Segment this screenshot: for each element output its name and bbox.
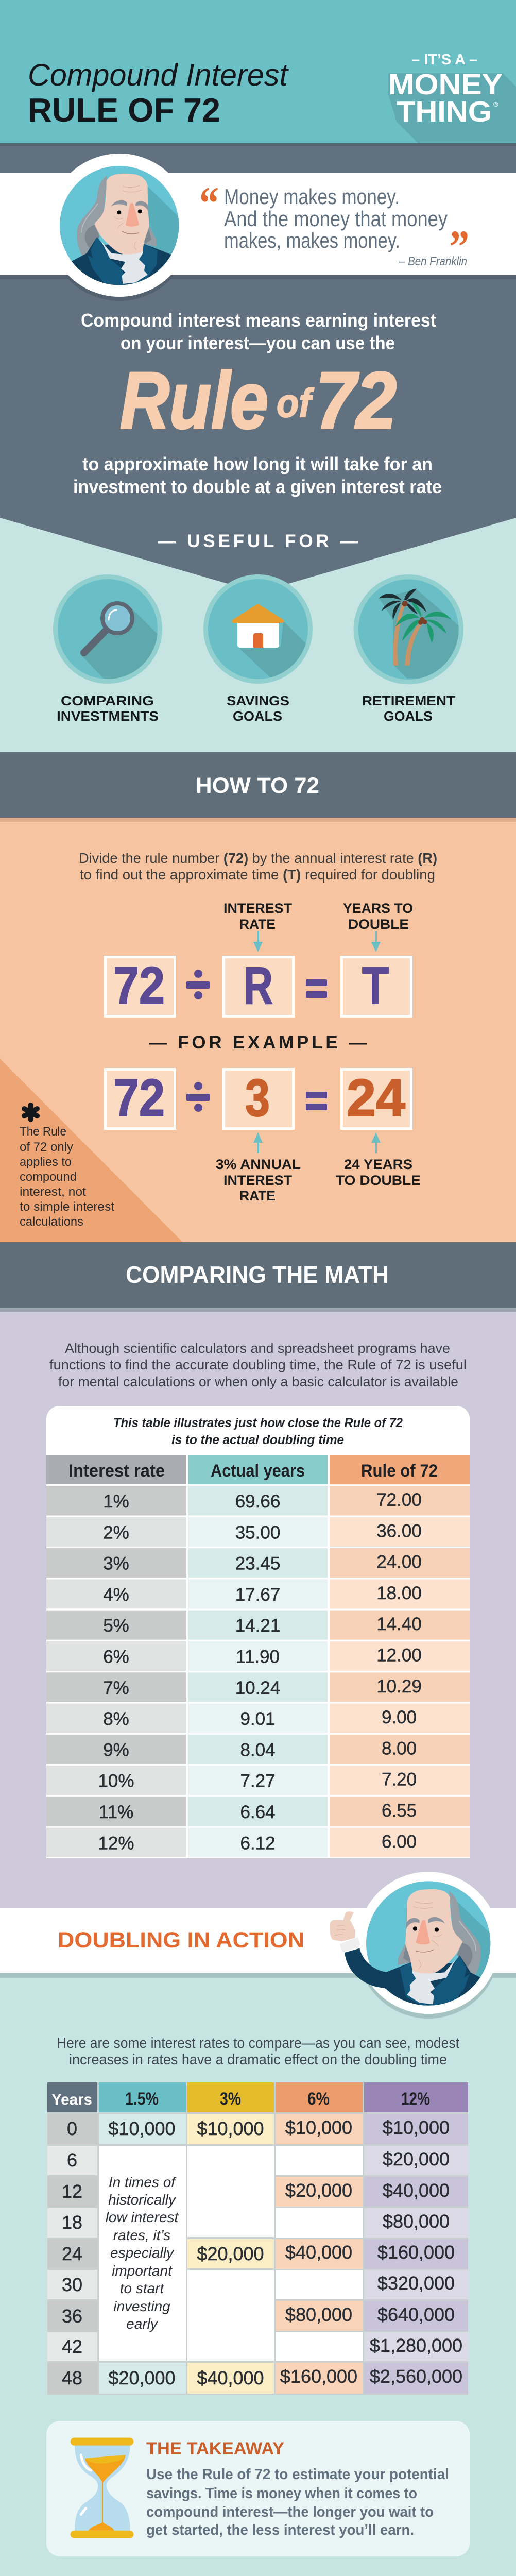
column: 12 percent: $20,000 <box>383 2148 450 2170</box>
column: 1.5 percent: $10,000 <box>108 2118 176 2139</box>
label: years to double <box>343 901 413 932</box>
table values: 35.00 <box>235 1522 280 1543</box>
panel: the takeaway <box>46 2421 470 2556</box>
table values: 12% <box>98 1833 134 1853</box>
quote text: ” <box>450 222 469 273</box>
column: years: 12 <box>62 2181 82 2202</box>
panel: how to 72 <box>0 850 437 1242</box>
table values: 9.01 <box>240 1709 276 1729</box>
table cell fills <box>47 2114 468 2394</box>
note: compound only: calculations <box>20 1215 83 1229</box>
intro text continued <box>73 453 442 497</box>
note: low interest rates: important <box>112 2263 173 2279</box>
label: 3% annual interest rate: 3% ANNUAL <box>216 1157 301 1172</box>
column: years: 24 <box>62 2243 82 2264</box>
table values: 7.27 <box>240 1771 276 1791</box>
title <box>28 58 289 129</box>
logo: it's a money thing: MONEY <box>388 68 503 101</box>
heading: doubling in action: DOUBLING IN ACTION <box>58 1928 304 1953</box>
column: 12 percent: $40,000 <box>383 2180 450 2201</box>
table header: 3% <box>220 2089 241 2109</box>
logo: it's a money thing: – IT’S A – <box>411 52 477 68</box>
column: 12 percent: $80,000 <box>383 2211 450 2232</box>
heading: how to 72: HOW TO 72 <box>196 773 319 798</box>
label: savings goals: GOALS <box>233 708 282 724</box>
label: years to double: YEARS TO <box>343 901 413 916</box>
table header: Rule of 72 <box>361 1461 438 1481</box>
table header: Interest rate <box>68 1461 165 1481</box>
icon: house <box>203 574 313 684</box>
column: 1.5 percent <box>108 2118 176 2388</box>
panel: doubling in action <box>47 1872 500 2395</box>
title: Compound Interest <box>28 58 289 92</box>
heading: comparing the math: COMPARING THE MATH <box>126 1261 389 1288</box>
takeaway text <box>146 2466 449 2538</box>
column: 3 percent <box>197 2118 264 2388</box>
note: low interest rates <box>106 2174 179 2332</box>
quote text: – Ben Franklin <box>399 255 467 268</box>
label: interest rate <box>223 901 293 932</box>
label: savings goals <box>227 693 289 724</box>
table: growth of 10000 by rate <box>47 2082 468 2395</box>
intro paragraph: Here are some interest rates to compare—as you can see, modest <box>57 2035 459 2052</box>
table caption <box>113 1416 403 1447</box>
portrait: ben franklin <box>60 166 179 285</box>
formula: 72 / 3 = 24: 72 <box>113 1069 165 1127</box>
table values: 7.20 <box>382 1770 417 1790</box>
icon: hourglass <box>71 2438 133 2538</box>
table caption: This table illustrates just how close the Rule of 72 <box>113 1416 403 1430</box>
quote text: makes, makes money. <box>224 228 400 252</box>
table values: 3% <box>103 1554 129 1574</box>
table values: 14.40 <box>376 1614 422 1634</box>
table header <box>46 1455 470 1484</box>
label: interest rate: RATE <box>239 917 276 932</box>
arrow: down to T <box>371 931 381 952</box>
label: comparing investments: INVESTMENTS <box>57 708 159 724</box>
formula: 72 / R = T: T <box>362 956 389 1015</box>
formula: 72 / R = T: R <box>244 956 273 1015</box>
note: compound only: applies to <box>20 1155 72 1169</box>
table header: Actual years <box>211 1461 305 1481</box>
table values: 6.00 <box>382 1832 417 1852</box>
table values: 36.00 <box>376 1521 422 1541</box>
note: compound only <box>20 1125 114 1229</box>
column: 12 percent <box>370 2117 462 2387</box>
table values: 11.90 <box>236 1647 280 1667</box>
column: 3 percent: $10,000 <box>197 2118 264 2139</box>
intro paragraph: Although scientific calculators and spreadsheet programs have <box>65 1341 450 1356</box>
note: low interest rates: rates, it’s <box>113 2227 170 2243</box>
table values: 9% <box>103 1740 129 1760</box>
heading: for example: — FOR EXAMPLE — <box>149 1032 367 1053</box>
table values: 69.66 <box>235 1492 280 1512</box>
column: 12 percent: $640,000 <box>377 2304 455 2325</box>
table values: 14.21 <box>235 1616 280 1636</box>
table values: 5% <box>103 1616 129 1636</box>
column: years: 0 <box>67 2118 77 2139</box>
heading: rule of 72: 72 <box>316 356 397 446</box>
column: 6 percent: $80,000 <box>285 2304 352 2325</box>
column: 12 percent: $2,560,000 <box>370 2366 462 2387</box>
table values: 23.45 <box>235 1554 280 1574</box>
takeaway text: savings. Time is money when it comes to <box>146 2485 417 2502</box>
logo: it's a money thing: THING <box>397 95 492 128</box>
column: 12 percent: $160,000 <box>377 2242 455 2263</box>
icon: magnifying glass <box>53 574 162 684</box>
table values: 10.24 <box>235 1678 280 1698</box>
note: low interest rates: In times of <box>109 2174 177 2190</box>
label: 3% annual interest rate: RATE <box>239 1188 276 1204</box>
panel: intro <box>73 310 442 497</box>
quote text: “ <box>199 178 219 229</box>
intro paragraph: functions to find the accurate doubling time, the Rule of 72 is useful <box>49 1357 467 1372</box>
table values: 6.55 <box>382 1801 417 1821</box>
takeaway text: Use the Rule of 72 to estimate your potential <box>146 2466 449 2483</box>
table values <box>98 1490 422 1853</box>
column: 6 percent: $40,000 <box>285 2242 352 2263</box>
table values: 9.00 <box>382 1707 417 1727</box>
icon: palm trees <box>354 574 463 684</box>
table: doubling time comparison <box>46 1406 470 1858</box>
label: years to double: DOUBLE <box>348 917 409 932</box>
column: 12 percent: $10,000 <box>383 2117 450 2138</box>
label: 3% annual interest rate <box>216 1157 301 1204</box>
note: low interest rates: historically <box>108 2192 177 2208</box>
table header: 1.5% <box>125 2089 159 2109</box>
label: 3% annual interest rate: INTEREST <box>223 1173 293 1188</box>
formula: 72 / 3 = 24: 24 <box>347 1069 405 1127</box>
table values: 17.67 <box>235 1585 280 1605</box>
intro text continued: to approximate how long it will take for an <box>82 453 433 474</box>
note: low interest rates: early <box>126 2316 159 2332</box>
formula: 72 / 3 = 24: 3 <box>245 1069 270 1127</box>
table caption: is to the actual doubling time <box>171 1433 344 1447</box>
table values: 2% <box>103 1522 129 1543</box>
table header <box>47 2082 468 2112</box>
arrow: up to 24 <box>371 1132 381 1153</box>
intro text continued: investment to double at a given interest rate <box>73 476 442 497</box>
column: 6 percent: $20,000 <box>285 2180 352 2201</box>
table values: 7% <box>103 1678 129 1698</box>
column: 1.5 percent: $20,000 <box>108 2367 176 2388</box>
note: compound only: compound <box>20 1170 77 1184</box>
column: 3 percent: $40,000 <box>197 2367 264 2388</box>
intro paragraph: increases in rates have a dramatic effect on the doubling time <box>69 2052 447 2068</box>
table values: 11% <box>99 1802 133 1822</box>
note: low interest rates: low interest <box>106 2209 179 2225</box>
column: years: 42 <box>62 2336 82 2357</box>
table values: 1% <box>103 1492 129 1512</box>
table header: Years <box>51 2091 92 2108</box>
title: RULE OF 72 <box>28 91 220 129</box>
intro paragraph: for mental calculations or when only a basic calculator is available <box>58 1374 458 1389</box>
logo: it's a money thing: ® <box>493 100 498 108</box>
arrow: up to 3 <box>253 1132 263 1153</box>
table values: 72.00 <box>376 1490 422 1510</box>
panel: comparing the math <box>46 1341 470 1858</box>
column: 3 percent: $20,000 <box>197 2243 264 2264</box>
column: 12 percent: $320,000 <box>377 2273 455 2294</box>
table values: 8.00 <box>382 1738 417 1758</box>
table values: 8.04 <box>240 1740 276 1760</box>
label: comparing investments: COMPARING <box>61 693 154 708</box>
icon: asterisk <box>24 1105 37 1120</box>
column: years: 6 <box>67 2149 77 2171</box>
logo: it's a money thing <box>381 46 516 143</box>
formula: 72 / R = T: 72 <box>113 956 165 1015</box>
quote text: Money makes money. <box>224 184 400 209</box>
table values: 24.00 <box>376 1552 422 1572</box>
label: savings goals: SAVINGS <box>227 693 289 708</box>
formula: 72 / 3 = 24 <box>105 1069 411 1128</box>
note: low interest rates: to start <box>120 2280 165 2296</box>
column: 6 percent: $160,000 <box>280 2366 357 2387</box>
intro text: on your interest—you can use the <box>121 332 395 353</box>
label: retirement goals: RETIREMENT <box>362 693 455 708</box>
panel: header <box>28 46 516 143</box>
column: 6 percent: $10,000 <box>285 2117 352 2138</box>
note: low interest rates: investing <box>113 2298 170 2314</box>
intro paragraph <box>49 1341 467 1389</box>
column: years: 36 <box>62 2306 82 2327</box>
table values: 6.64 <box>240 1802 276 1822</box>
table row fills <box>46 1486 470 1857</box>
table header: 6% <box>307 2089 330 2109</box>
column: years <box>62 2118 82 2388</box>
column: 12 percent: $1,280,000 <box>370 2335 462 2356</box>
arm and thumbs-up hand <box>330 1911 407 2001</box>
label: retirement goals <box>362 693 455 724</box>
table values: 6% <box>103 1647 129 1667</box>
label: comparing investments <box>57 693 159 724</box>
table header: 12% <box>401 2089 430 2109</box>
panel: useful for <box>0 518 516 752</box>
heading: the takeaway: THE TAKEAWAY <box>146 2439 284 2459</box>
label: retirement goals: GOALS <box>384 708 433 724</box>
portrait: ben franklin thumbs up <box>330 1872 500 2021</box>
instructions: to find out the approximate time (T) required for doubling <box>80 867 435 883</box>
heading: rule of 72: Rule <box>120 356 268 446</box>
takeaway text: get started, the less interest you’ll earn. <box>146 2522 414 2538</box>
heading: rule of 72 <box>120 356 397 446</box>
label: 24 years to double: TO DOUBLE <box>336 1173 421 1188</box>
table values: 10.29 <box>376 1676 422 1697</box>
column: years: 48 <box>62 2367 82 2388</box>
label: interest rate: INTEREST <box>223 901 293 916</box>
intro text <box>81 310 436 353</box>
table values: 8% <box>103 1709 129 1729</box>
column: years: 18 <box>62 2212 82 2233</box>
panel: quote band <box>0 154 516 301</box>
instructions <box>79 850 437 883</box>
note: compound only: The Rule <box>20 1125 66 1139</box>
heading: useful for: — USEFUL FOR — <box>158 531 358 551</box>
table values: 10% <box>98 1771 134 1791</box>
label: 24 years to double <box>336 1157 421 1188</box>
quote text <box>199 178 469 273</box>
table values: 4% <box>103 1585 129 1605</box>
column: years: 30 <box>62 2274 82 2295</box>
intro text: Compound interest means earning interest <box>81 310 436 331</box>
intro paragraph <box>57 2035 459 2068</box>
table values: 12.00 <box>376 1646 422 1665</box>
quote text: And the money that money <box>224 207 448 231</box>
table values: 18.00 <box>376 1583 422 1603</box>
heading: rule of 72: of <box>277 380 314 426</box>
note: compound only: to simple interest <box>20 1200 114 1214</box>
arrow: down to R <box>253 931 263 952</box>
formula: 72 / R = T <box>105 956 411 1016</box>
note: compound only: interest, not <box>20 1185 86 1199</box>
column: 6 percent <box>280 2117 357 2387</box>
table values: 6.12 <box>240 1833 276 1853</box>
instructions: Divide the rule number (72) by the annual interest rate (R) <box>79 850 437 866</box>
note: compound only: of 72 only <box>20 1140 73 1154</box>
note: low interest rates: especially <box>110 2245 175 2261</box>
label: 24 years to double: 24 YEARS <box>344 1157 412 1172</box>
takeaway text: compound interest—the longer you wait to <box>146 2504 434 2520</box>
